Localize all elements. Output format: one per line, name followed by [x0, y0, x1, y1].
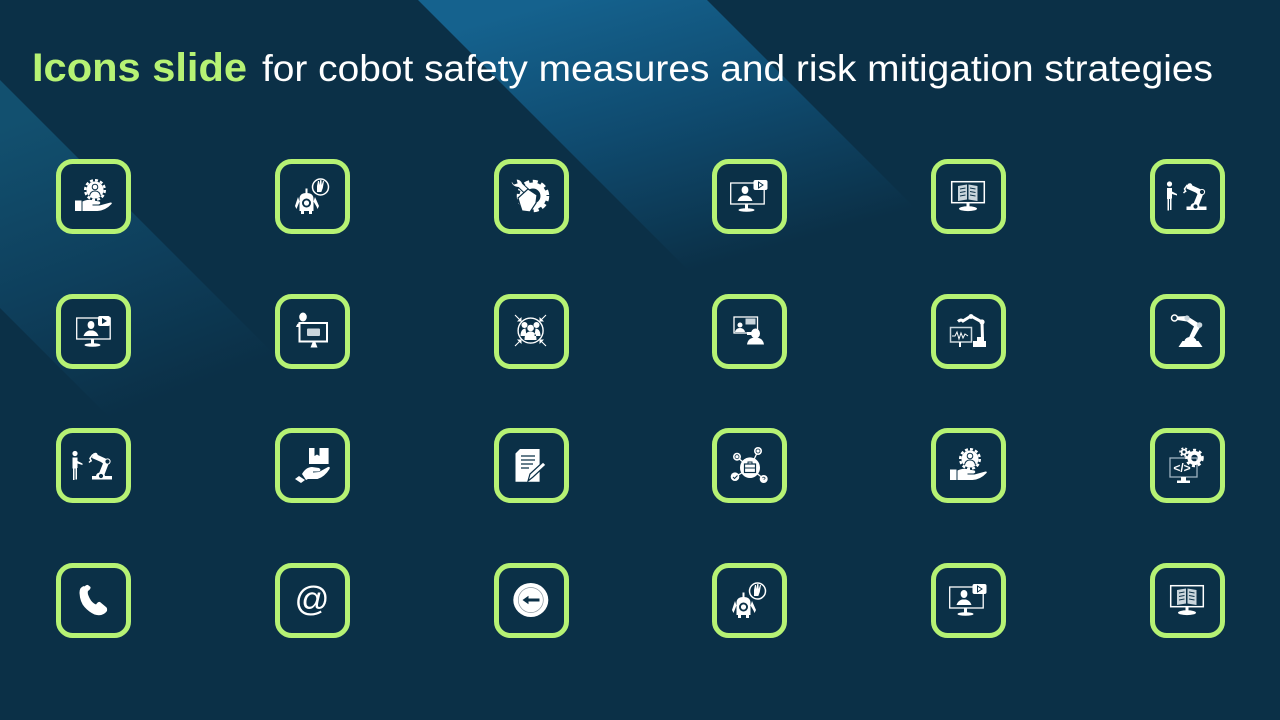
tile: hand with gear — [58, 162, 128, 232]
tile: robot do not touch second — [714, 566, 784, 636]
tile: robot do not touch — [278, 162, 348, 232]
title: Icons slide — [32, 46, 247, 90]
icon: monitor with person and play — [731, 180, 768, 212]
icon: book on monitor — [952, 182, 984, 211]
icon: hand wrench gear — [511, 179, 548, 212]
tile: back arrow — [496, 566, 566, 636]
tile: robot arm with monitor — [934, 296, 1004, 366]
icon: hand holding gear — [75, 180, 112, 211]
tile: worker and robot arm second — [58, 430, 128, 500]
icon: circle with left arrow — [513, 583, 548, 617]
icon: hand holding gear — [950, 449, 987, 480]
icon: monitor with person and play — [950, 584, 986, 616]
tile: online video — [58, 296, 128, 366]
tile: code and gears — [1152, 430, 1222, 500]
tile: worker and robot arm — [1152, 162, 1222, 232]
tile: video call — [714, 296, 784, 366]
icon: industrial robot arm — [1172, 315, 1202, 347]
icon: people in circle with arrows — [515, 315, 546, 346]
icon: worker with robot arm — [1167, 181, 1206, 210]
tile: phone — [58, 566, 128, 636]
icon: robot with stop hand — [732, 583, 766, 618]
tile: monitor person play second — [934, 566, 1004, 636]
icon: robot arm and pulse monitor — [950, 314, 986, 347]
icon: monitor with person and filled play — [77, 316, 110, 347]
icon: hand holding box — [295, 448, 330, 483]
tile: wrench and gear — [496, 162, 566, 232]
tile: hand holding package — [278, 430, 348, 500]
icon: book on monitor — [1171, 586, 1203, 615]
tile: email — [278, 566, 348, 636]
tile: monitor person play — [714, 162, 784, 232]
icon: briefcase with connected nodes — [731, 447, 768, 483]
icon: document with pencil — [516, 449, 546, 482]
icon: person in front of screen — [734, 317, 764, 344]
icon: phone handset — [80, 585, 107, 615]
tile: digital book — [934, 162, 1004, 232]
tile: robot arm — [1152, 296, 1222, 366]
icon: at sign: @ — [294, 580, 330, 618]
tile: document — [496, 430, 566, 500]
tile: team focus — [496, 296, 566, 366]
tile: hand with gear second — [934, 430, 1004, 500]
icon: robot with stop hand — [295, 179, 328, 214]
icon: coding monitor with gears: </> — [1173, 461, 1191, 475]
tile: presenter — [278, 296, 348, 366]
tile: digital book second — [1152, 566, 1222, 636]
tile: briefcase network — [714, 430, 784, 500]
title: for cobot safety measures and risk mitigation strategies — [262, 48, 1213, 89]
icon: person above monitor with chat — [296, 312, 327, 348]
icon: worker with robot arm — [72, 451, 112, 480]
